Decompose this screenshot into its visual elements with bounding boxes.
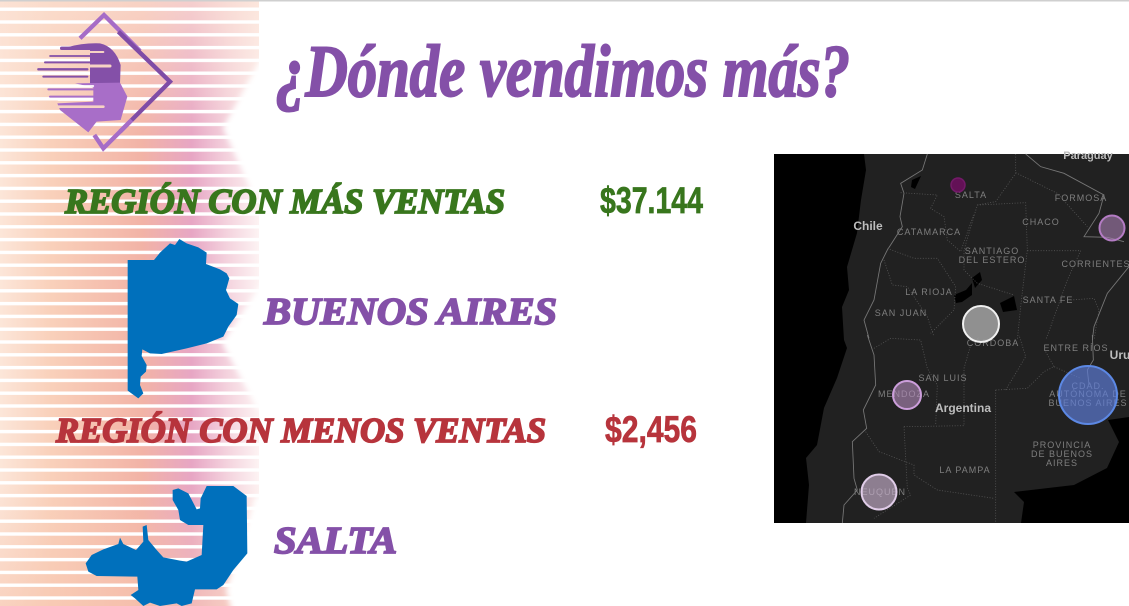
map place labels	[853, 150, 1129, 497]
map place labels: SAN JUAN	[875, 308, 927, 318]
logo head silhouette	[38, 43, 127, 132]
map place labels: AIRES	[1046, 458, 1078, 468]
bubble: Córdoba	[963, 306, 999, 342]
map ocean	[774, 154, 1129, 523]
panel: dark bubble map of Argentina	[774, 150, 1129, 523]
background: striped gradient panel	[0, 2, 270, 606]
bubble: Misiones	[1100, 216, 1124, 240]
region name: Salta: SALTA	[274, 520, 397, 562]
page top rule	[0, 0, 1129, 2]
map place labels: CDAD.	[1071, 381, 1105, 391]
map place labels: CORRIENTES	[1061, 259, 1129, 269]
map place labels: DEL ESTERO	[959, 255, 1025, 265]
icon: Buenos Aires province map	[128, 239, 238, 398]
map place labels: CATAMARCA	[897, 227, 961, 237]
map place labels: MENDOZA	[878, 389, 930, 399]
map land mass	[806, 154, 1129, 523]
map national borders	[864, 154, 1129, 340]
map place labels: Paraguay	[1063, 150, 1114, 162]
map place labels: SAN LUIS	[918, 373, 968, 383]
map lakes	[911, 176, 1017, 312]
map place labels: DE BUENOS	[1031, 449, 1093, 459]
map place labels: Argentina	[935, 401, 991, 415]
map place labels: FORMOSA	[1055, 193, 1107, 203]
map province borders	[884, 154, 1099, 340]
value: highest sales: $37.144	[600, 180, 703, 221]
bubble: Buenos Aires	[1059, 366, 1117, 424]
map place labels: AUTÓNOMA DE	[1049, 389, 1127, 399]
map place labels: NEUQUÉN	[854, 487, 906, 497]
map place labels: LA PAMPA	[939, 465, 991, 475]
map place labels: PROVINCIA	[1033, 440, 1091, 450]
map place labels: SANTIAGO	[965, 246, 1019, 256]
icon: Salta province map	[86, 486, 247, 606]
map place labels: BUENOS AIRES	[1048, 398, 1128, 408]
bubble: Salta	[951, 178, 965, 192]
region name: Buenos Aires: BUENOS AIRES	[263, 291, 557, 333]
map place labels: Chile	[853, 219, 883, 233]
map place labels: CÓRDOBA	[967, 338, 1019, 348]
logo: diamond and digital head	[38, 15, 170, 148]
bubble: Mendoza	[893, 381, 921, 409]
heading: region with most sales: REGIÓN CON MÁS VENTAS	[64, 181, 505, 221]
bubble: Neuquén	[862, 474, 896, 510]
logo diamond outline	[80, 15, 170, 148]
map place labels: SALTA	[955, 190, 987, 200]
title: ¿Dónde vendimos más?	[276, 31, 850, 113]
map place labels: ENTRE RÍOS	[1043, 343, 1109, 353]
map place labels: SANTA FE	[1023, 295, 1073, 305]
map place labels: LA RIOJA	[905, 287, 953, 297]
value: lowest sales: $2,456	[605, 409, 697, 450]
map place labels: CHACO	[1022, 217, 1060, 227]
heading: region with fewest sales: REGIÓN CON MENOS VENTAS	[55, 410, 546, 450]
